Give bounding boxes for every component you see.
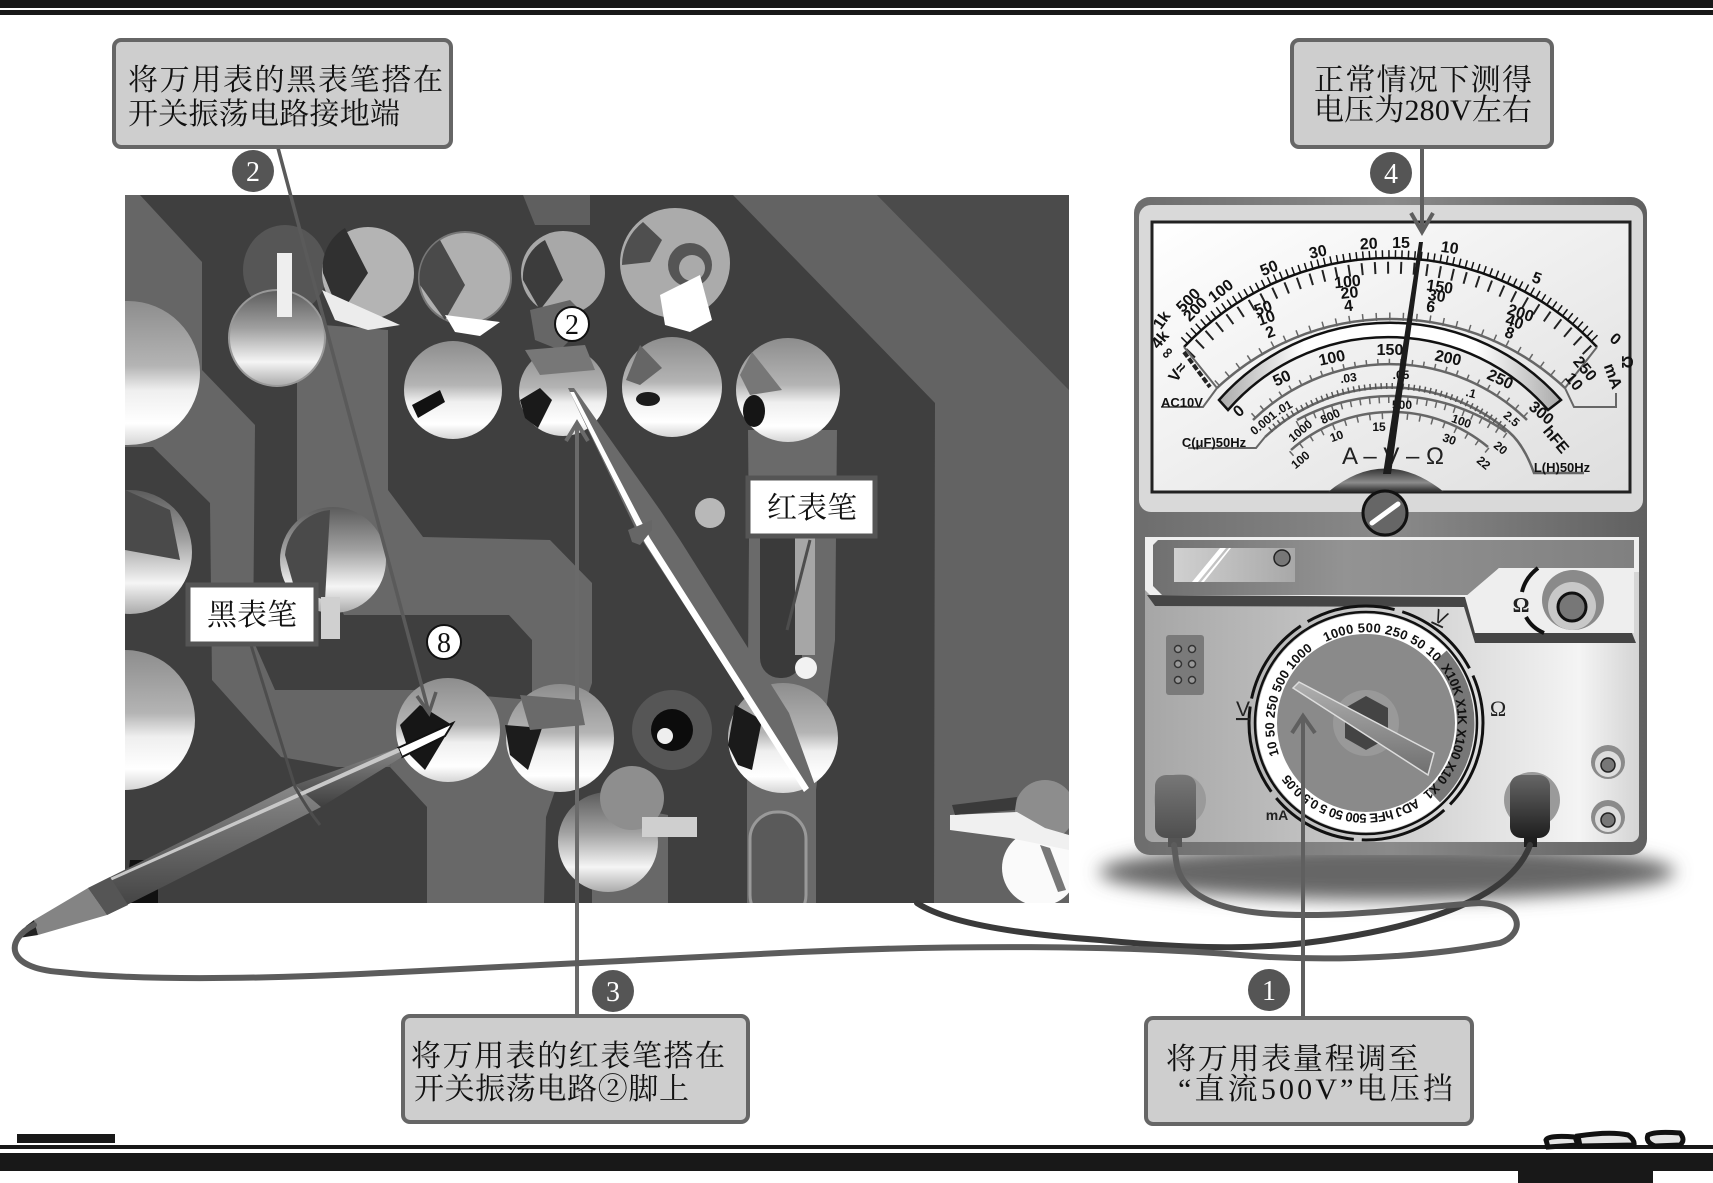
scale numbers: 0.001: [1247, 408, 1280, 438]
red probe: [568, 388, 816, 792]
range dial: 1000 500 250 50 10: [1323, 623, 1441, 661]
step badge 1: [1248, 969, 1290, 1011]
scale window: [1152, 222, 1630, 492]
callout: range setting step: “直流500V”电压挡: [1178, 1073, 1453, 1106]
lower face plate: [1145, 537, 1639, 842]
scale numbers: 150: [1377, 342, 1403, 359]
dial hub: [1333, 690, 1399, 756]
callout: range setting step: [1146, 1018, 1472, 1124]
scale numbers: 15: [1392, 235, 1410, 252]
board diagonal trace: [733, 195, 1069, 903]
zero adjust screw: [1363, 491, 1407, 535]
dial AC V label: V: [1430, 606, 1451, 630]
meter needle: [1383, 242, 1423, 474]
callout: red probe step: [403, 1016, 748, 1122]
scale numbers: ∞: [1157, 343, 1178, 363]
callout: red probe step: 将万用表的红表笔搭在: [411, 1040, 725, 1073]
socket panel: [1166, 635, 1204, 695]
scale numbers: 200: [1433, 348, 1463, 370]
board slot trace: [747, 430, 837, 903]
scale numbers: 250: [1569, 353, 1600, 385]
scale numbers: 1000: [1286, 417, 1315, 445]
scale numbers: .05: [1393, 368, 1410, 382]
step badge 2: [232, 150, 274, 192]
scale numbers: 0: [1606, 330, 1624, 349]
callout: black probe step: 开关振荡电路接地端: [128, 98, 400, 131]
callout: red probe step: 开关振荡电路②脚上: [414, 1073, 689, 1106]
scale numbers: 10: [1255, 308, 1278, 330]
scale numbers: 800: [1318, 406, 1343, 427]
leader line from pin 2: [566, 423, 588, 1016]
window stud: [1274, 550, 1290, 566]
dial scale text: 10 50 250 500 1000: [1265, 644, 1312, 756]
scale numbers: 20: [1491, 438, 1510, 458]
scale numbers: 30: [1441, 430, 1458, 448]
meter hub: [1328, 468, 1444, 492]
pin 2 marker: [555, 307, 589, 341]
scale numbers: 2: [1263, 323, 1278, 342]
scale numbers: 100: [1317, 347, 1347, 370]
scale numbers: 5: [1529, 269, 1544, 288]
pin 8 marker: [427, 625, 461, 659]
scale numbers: [1148, 235, 1635, 475]
leader from red probe label: [787, 540, 810, 630]
scale numbers: 50: [1252, 298, 1275, 320]
scale numbers: 10: [1328, 427, 1346, 445]
dial pointer knob: [1293, 682, 1434, 775]
scale numbers: 50: [1258, 258, 1281, 280]
scale numbers: AC10V: [1161, 395, 1203, 410]
scale numbers: 30: [1308, 242, 1329, 263]
scale numbers: 500: [1173, 285, 1204, 316]
scale numbers: 40: [1503, 312, 1526, 334]
board left trace: [125, 195, 413, 767]
panel: multimeter: [1134, 197, 1647, 855]
range dial: ADJ hFE 500 50 5 0.5 0.05 50: [1282, 775, 1418, 823]
ohm adjust area: Ω: [1513, 593, 1529, 617]
callout: black probe step: 将万用表的黑表笔搭在: [128, 64, 443, 97]
dial mA label: mA: [1266, 807, 1288, 823]
label band: [1153, 540, 1634, 595]
meter shadow: [1099, 844, 1675, 900]
step badge 3: [592, 970, 634, 1012]
pin 8 marker: 8: [437, 628, 451, 659]
callout: voltage reading: 电压为280V左右: [1314, 94, 1532, 127]
scale numbers: 1k: [1150, 308, 1174, 333]
upper slot: [760, 538, 802, 678]
scale numbers: 200: [1180, 294, 1211, 325]
scale numbers: 4k: [1148, 328, 1173, 352]
scale numbers: Ω: [1618, 356, 1635, 369]
leader line to range dial: [1292, 716, 1315, 1016]
label band white edge: [1145, 537, 1639, 600]
callout: range setting step: 将万用表量程调至: [1166, 1043, 1418, 1076]
upper face plate: [1139, 205, 1643, 512]
black probe: [19, 723, 453, 938]
solder pads: [55, 208, 1078, 906]
step badge 3: 3: [606, 977, 620, 1008]
scale numbers: 150: [1425, 277, 1454, 298]
dial ohm label: Ω: [1490, 696, 1506, 721]
scale numbers: 0: [1230, 402, 1248, 421]
pin 2 marker: 2: [565, 310, 579, 341]
leader line to needle reading: [1411, 148, 1433, 232]
scale numbers: 20: [1359, 236, 1378, 253]
label: black probe: 黑表笔: [207, 599, 297, 632]
step badge 1: 1: [1262, 976, 1276, 1007]
board corner dark copper: [877, 195, 1069, 390]
scale numbers: 8: [1503, 324, 1516, 343]
band shadow: [1147, 595, 1636, 643]
scale numbers: .01: [1273, 397, 1295, 418]
meter case: [1134, 197, 1647, 855]
scale numbers: 22: [1474, 453, 1493, 473]
scale numbers: 100: [1333, 273, 1362, 292]
scale numbers: 100: [1205, 276, 1237, 306]
model window: [1174, 548, 1295, 582]
test lead wires: [15, 845, 1530, 978]
scale numbers: 50: [1270, 367, 1294, 390]
scale numbers: L(H)50Hz: [1534, 460, 1591, 475]
scale arcs and ticks: [1161, 255, 1616, 473]
output sockets: [1591, 745, 1625, 834]
scale numbers: 10: [1440, 239, 1460, 258]
panel: circuit board photo: [125, 195, 1069, 903]
scale numbers: V≈: [1166, 359, 1191, 385]
scale numbers: .03: [1339, 370, 1358, 386]
scale numbers: 500: [1392, 398, 1412, 412]
scale numbers: 30: [1427, 287, 1447, 306]
label: red probe: [748, 478, 875, 536]
scale numbers: 15: [1372, 420, 1386, 434]
right plug: [1504, 772, 1560, 847]
lower slot: [748, 810, 808, 903]
scale numbers: 4: [1343, 298, 1354, 315]
scale numbers: mA: [1600, 361, 1625, 392]
scale numbers: C(μF)50Hz: [1182, 435, 1247, 450]
left plug: [1154, 774, 1206, 847]
leader line to pin 8: [278, 148, 436, 713]
step badge 4: [1370, 152, 1412, 194]
callout: voltage reading: 正常情况下测得: [1314, 64, 1532, 97]
scale numbers: 2.5: [1501, 408, 1523, 430]
board centre trace: [297, 323, 592, 903]
callout: voltage reading: [1292, 40, 1552, 147]
page footer bars: [0, 1134, 1713, 1183]
scale numbers: hFE: [1539, 423, 1572, 457]
scale numbers: 100: [1288, 448, 1313, 472]
board lower stub trace: [592, 814, 668, 903]
label: black probe: [188, 585, 316, 644]
scale numbers: 250: [1484, 367, 1516, 393]
scale numbers: .1: [1464, 385, 1478, 401]
ohm adjust area: [1465, 568, 1634, 633]
label: red probe: 红表笔: [767, 492, 857, 525]
range dial: [1236, 604, 1506, 842]
leader from black probe label: [251, 645, 320, 825]
dial hexagon: [1345, 696, 1388, 750]
scale numbers: 10: [1561, 370, 1586, 394]
range dial: X10K X1K X100 X10 X1: [1423, 663, 1467, 799]
scale numbers: 100: [1450, 411, 1473, 431]
board top stub trace: [523, 195, 590, 225]
dial V label: V: [1236, 698, 1250, 721]
step badge 4: 4: [1384, 159, 1398, 190]
icon: small probe ornament: [1546, 1132, 1683, 1147]
scale numbers: 200: [1505, 302, 1536, 326]
scale numbers: 6: [1425, 299, 1436, 317]
scale legend A-V-Ω: A – V – Ω: [1342, 443, 1444, 470]
step badge 2: 2: [246, 157, 260, 188]
scale numbers: 20: [1340, 284, 1359, 303]
top rule: [0, 0, 1713, 15]
scale numbers: 300: [1525, 398, 1557, 429]
callout: black probe step: [114, 40, 451, 147]
